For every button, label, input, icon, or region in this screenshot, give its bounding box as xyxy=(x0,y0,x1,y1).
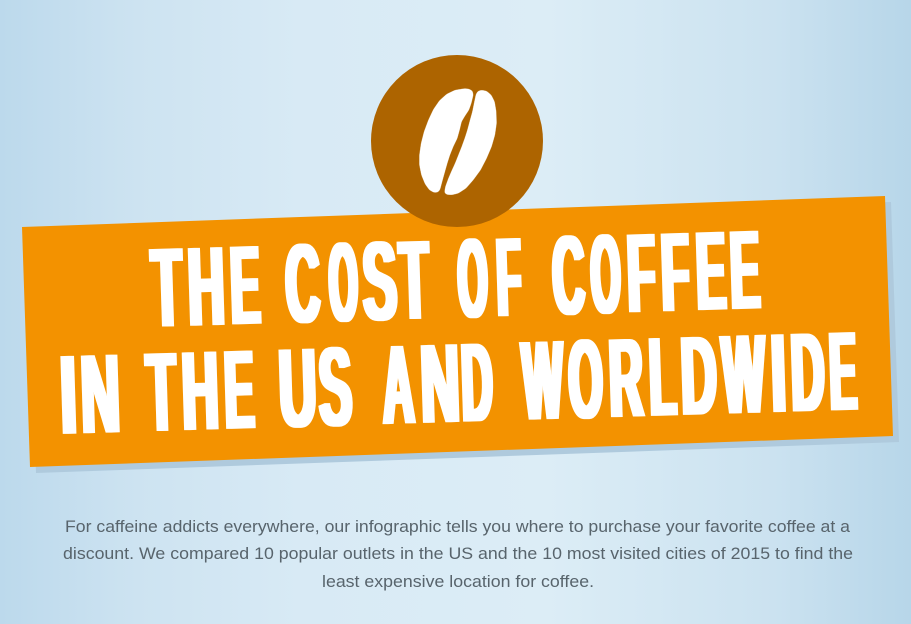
title line 1: S xyxy=(361,217,399,344)
title line 1: F xyxy=(495,214,523,340)
banner shadow xyxy=(28,202,899,473)
title line 1: E xyxy=(229,222,262,349)
title line 1: F xyxy=(659,209,691,335)
title line 2: R xyxy=(607,314,645,441)
title line 1: C xyxy=(551,212,586,339)
orange title banner xyxy=(22,196,893,467)
title line 2: T xyxy=(145,329,178,455)
title line 2: D xyxy=(679,312,718,439)
title line 2: A xyxy=(381,321,416,448)
title line 2: N xyxy=(79,330,122,457)
title line 2: E xyxy=(223,326,256,453)
title line 1: C xyxy=(284,220,322,347)
title: E xyxy=(728,206,761,333)
title line 1 xyxy=(150,206,761,351)
intro text: For caffeine addicts everywhere, our infographic tells you where to purchase your favorite coffee at a xyxy=(65,517,851,536)
title line 2: I xyxy=(769,310,788,436)
title line 1: O xyxy=(327,219,359,345)
title line 2: N xyxy=(419,320,461,447)
title line 2: L xyxy=(647,313,678,440)
title line 2: O xyxy=(567,315,604,442)
title line 1: T xyxy=(150,224,184,351)
intro text xyxy=(63,517,853,591)
title line 2: I xyxy=(58,332,79,458)
title line 1: T xyxy=(398,217,431,343)
title line 1: E xyxy=(694,207,727,334)
title line 2: D xyxy=(460,319,494,446)
icon: coffee bean xyxy=(419,88,497,195)
icon: coffee bean badge xyxy=(371,55,543,227)
title line 2: U xyxy=(277,324,318,451)
title line 2: W xyxy=(720,311,767,438)
title line 2: D xyxy=(789,309,826,436)
title line 1: H xyxy=(186,223,226,350)
title xyxy=(58,206,858,458)
title line 1: F xyxy=(625,210,657,336)
title line 1: O xyxy=(589,211,622,337)
title line 2 xyxy=(58,308,858,458)
text: E xyxy=(828,308,858,434)
intro text: least expensive location for coffee. xyxy=(322,572,594,591)
title line 2: H xyxy=(180,327,220,454)
title line 2: S xyxy=(317,323,353,450)
intro text: discount. We compared 10 popular outlets in the US and the 10 most visited cities of 2015 to find the xyxy=(63,544,853,563)
title line 2: W xyxy=(520,317,565,444)
title line 1: O xyxy=(456,215,489,342)
